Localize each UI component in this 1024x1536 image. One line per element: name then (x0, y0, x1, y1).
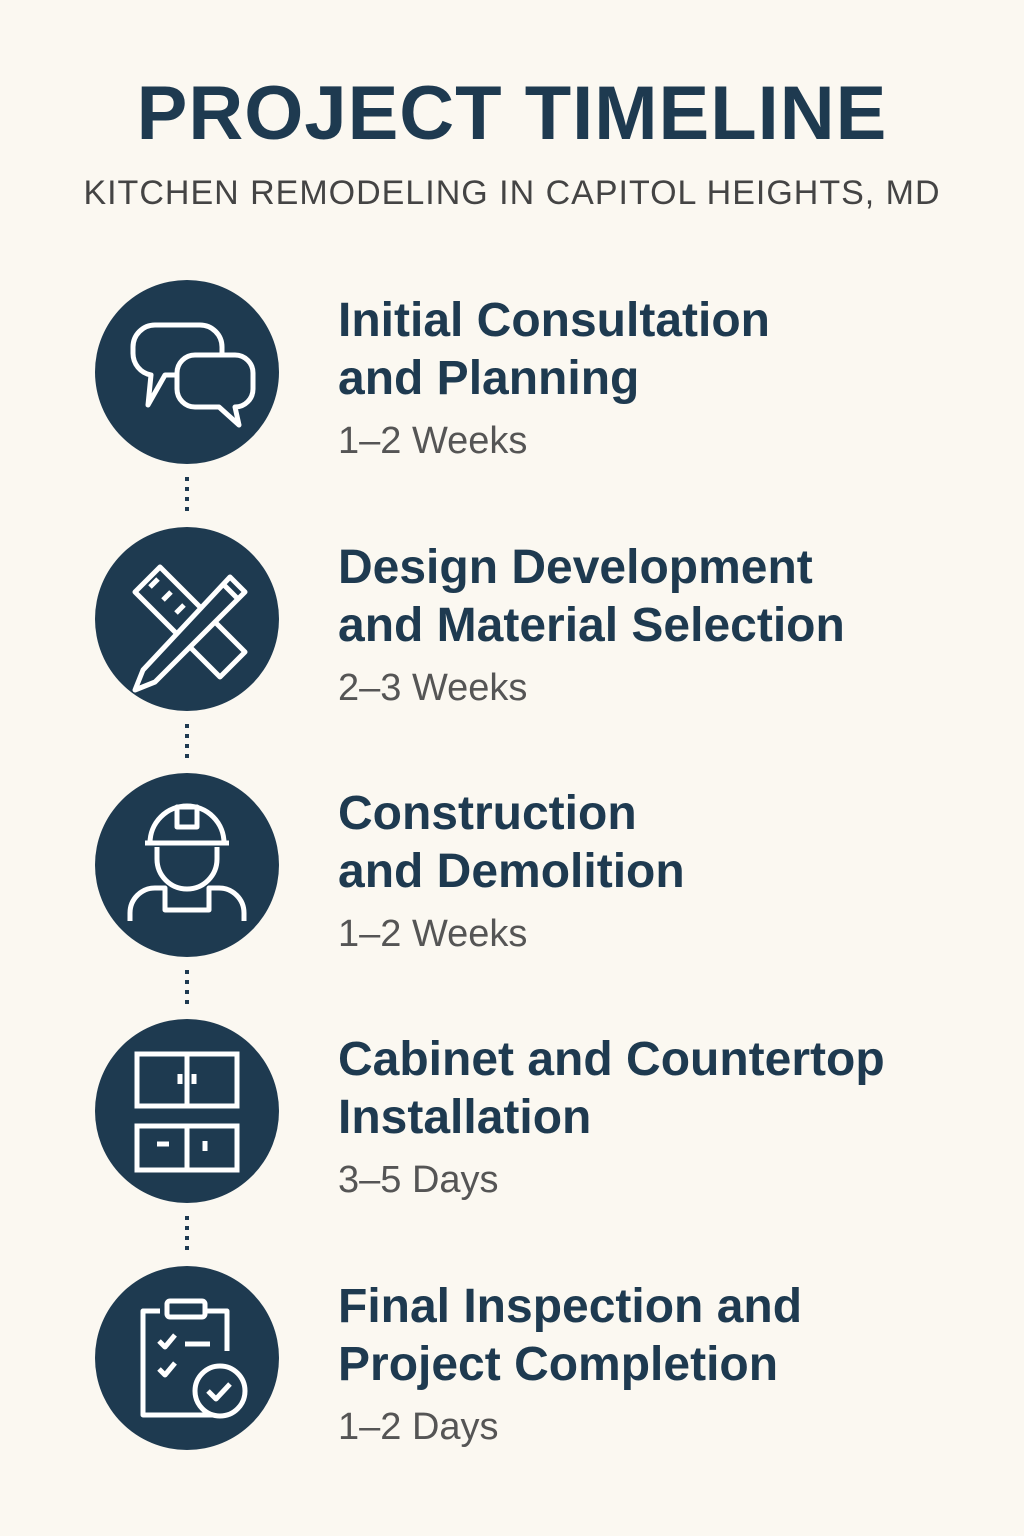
step 3 icon: worker (95, 773, 279, 957)
step 1 text: and Planning (338, 352, 639, 405)
step 5 text: Final Inspection and (338, 1280, 802, 1333)
step 2 text: and Material Selection (338, 599, 845, 652)
step 5 icon: clipboard check (95, 1266, 279, 1450)
step 4 text (338, 1033, 885, 1144)
subtitle: KITCHEN REMODELING IN CAPITOL HEIGHTS, MD (83, 174, 941, 212)
text: 3–5 Days (338, 1159, 499, 1201)
step 4 text: Cabinet and Countertop (338, 1033, 885, 1086)
step 2 icon: ruler and pencil (95, 527, 279, 711)
title: PROJECT TIMELINE (137, 71, 887, 156)
step 1 text: Initial Consultation (338, 294, 770, 347)
text: 1–2 Days (338, 1406, 499, 1448)
step 1 icon: chat bubbles (95, 280, 279, 464)
text: 1–2 Weeks (338, 420, 527, 462)
step 5 text: Project Completion (338, 1338, 778, 1391)
step 3 text (338, 787, 685, 898)
step 4 icon: cabinets (95, 1019, 279, 1203)
step 2 text: Design Development (338, 541, 813, 594)
step 2 text (338, 541, 845, 652)
step 3 text: and Demolition (338, 845, 685, 898)
text: 1–2 Weeks (338, 913, 527, 955)
step 3 text: Construction (338, 787, 637, 840)
step 1 text (338, 294, 770, 405)
step 5 text (338, 1280, 802, 1391)
step 4 text: Installation (338, 1091, 591, 1144)
text: 2–3 Weeks (338, 667, 527, 709)
